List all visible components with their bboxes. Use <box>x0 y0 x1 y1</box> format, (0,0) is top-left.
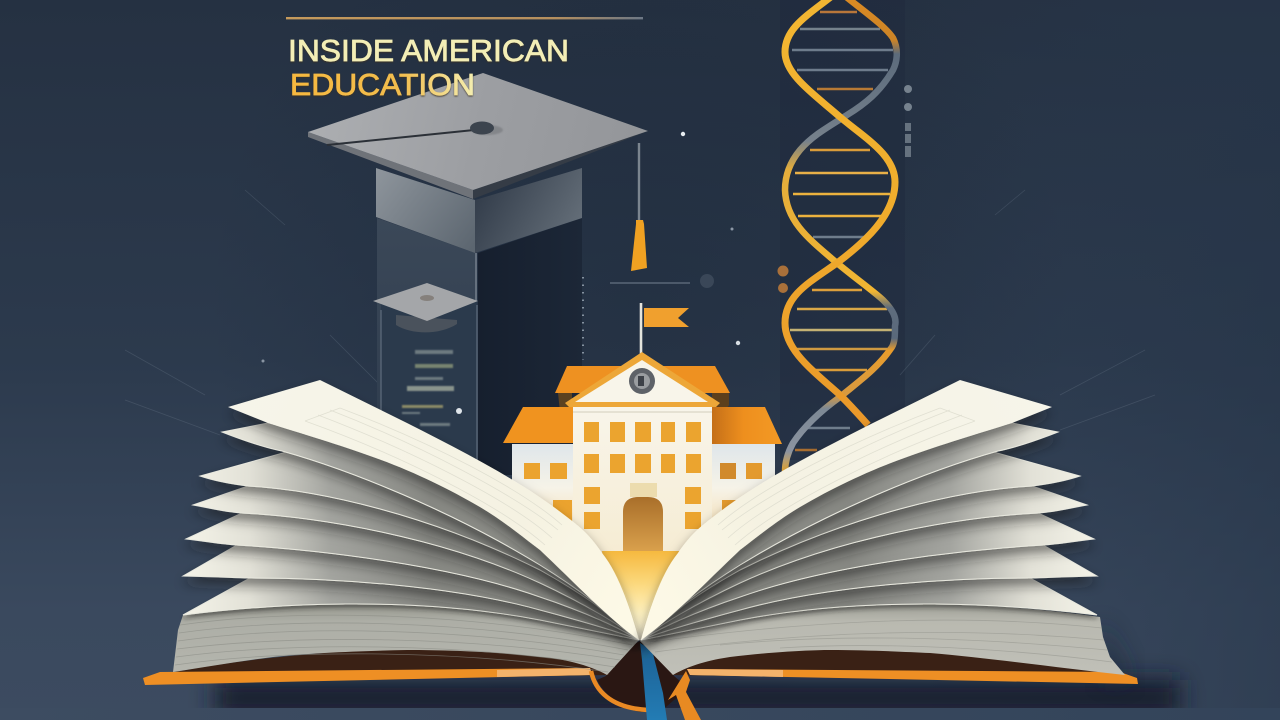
helix strand A <box>785 0 895 425</box>
main hall <box>573 407 712 555</box>
book cover left <box>143 668 648 710</box>
cap base <box>376 168 582 253</box>
main hall windows <box>584 422 701 529</box>
mortarboard <box>308 73 648 199</box>
clock seal <box>629 368 655 394</box>
small cap base <box>396 315 457 332</box>
bookmark ribbon <box>640 643 667 720</box>
left page block <box>173 604 639 675</box>
helix side markers <box>778 85 912 293</box>
book gutter interior <box>597 641 688 712</box>
title line two: EDUCATION <box>290 67 475 102</box>
right page block <box>639 604 1125 675</box>
book cover inner shadow <box>160 647 610 682</box>
title <box>288 33 569 102</box>
walkway <box>602 551 684 640</box>
book <box>0 380 1280 720</box>
book ground shadow <box>0 620 1280 720</box>
title line one: INSIDE AMERICAN <box>288 33 569 68</box>
school building <box>262 274 782 640</box>
pediment <box>565 352 720 407</box>
large graduation cap column <box>308 73 734 475</box>
book cover right <box>668 669 1138 720</box>
helix strand B <box>785 0 897 472</box>
back roof <box>555 366 730 393</box>
column left face <box>377 218 475 475</box>
DNA double helix <box>778 0 912 472</box>
left wing <box>503 407 574 554</box>
column right face <box>478 218 582 475</box>
tassel <box>631 143 647 271</box>
flag <box>641 303 689 354</box>
small graduation cap panel <box>373 283 478 471</box>
left fanned pages <box>183 380 639 640</box>
right wing <box>711 407 782 554</box>
helix rungs <box>790 12 895 450</box>
right fanned pages <box>641 380 1097 640</box>
small cap text lines <box>402 350 454 426</box>
door <box>623 483 663 551</box>
title rule <box>286 17 643 19</box>
small cap board <box>373 283 478 321</box>
